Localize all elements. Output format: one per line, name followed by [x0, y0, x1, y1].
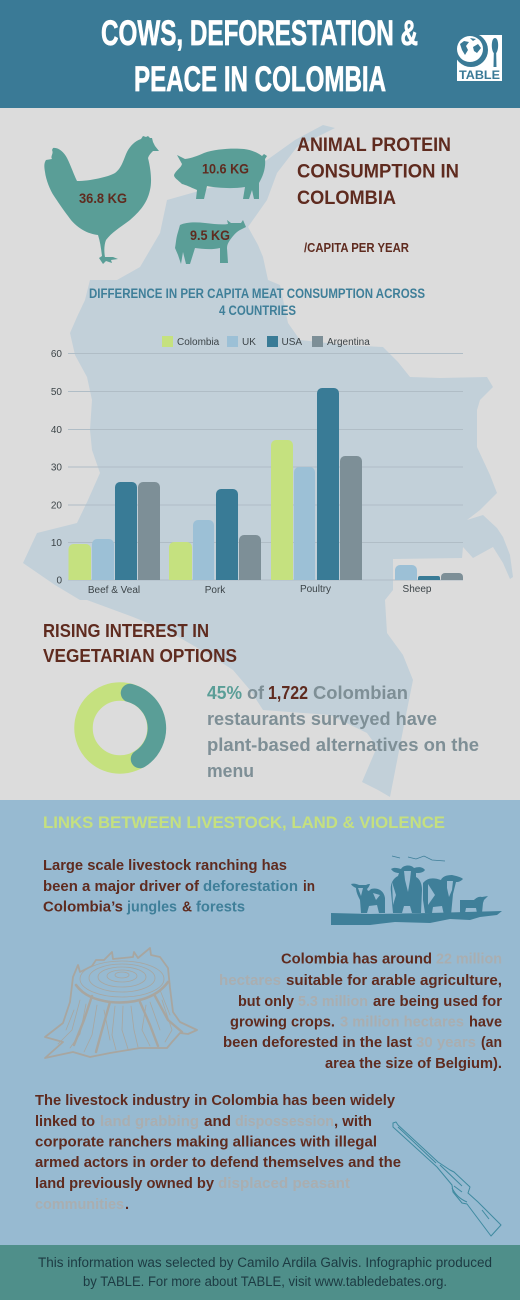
heading: animal protein consumption: ANIMAL PROTEIN — [297, 134, 451, 156]
legend — [162, 336, 370, 348]
text: arable land statistics: 30 years — [416, 1035, 476, 1051]
text: 45 percent of restaurants: 1,722 — [268, 683, 308, 703]
bars: pork — [169, 489, 261, 580]
text: ranching and deforestation: jungles — [126, 900, 177, 916]
text: ranching and deforestation: & — [182, 900, 192, 916]
chart title: DIFFERENCE IN PER CAPITA MEAT CONSUMPTION ACROSS — [89, 286, 425, 301]
text: 45 percent of restaurants: restaurants surveyed have — [207, 709, 437, 729]
text: arable land statistics: been deforested in the last — [223, 1035, 412, 1051]
per capita note: /CAPITA PER YEAR — [304, 241, 409, 255]
y axis labels: 0 — [56, 576, 62, 586]
icon: chicken with 36.8 kg: 36.8 KG — [79, 190, 127, 206]
title: PEACE IN COLOMBIA — [134, 60, 386, 99]
text: arable land statistics: suitable for arable agriculture, — [286, 973, 502, 989]
y axis labels — [51, 349, 62, 586]
text: arable land statistics: 5.3 million — [298, 994, 368, 1010]
text: arable land statistics: but only — [238, 994, 294, 1010]
text: arable land statistics: area the size of Belgium). — [325, 1056, 502, 1072]
category labels — [88, 584, 432, 596]
heading: animal protein consumption — [297, 134, 459, 209]
category labels: Poultry — [300, 584, 331, 595]
bar chart — [51, 336, 463, 596]
legend: Argentina — [327, 337, 370, 348]
donut chart: 45 percent — [84, 692, 157, 764]
credits text: This information was selected by Camilo Ardila Galvis. Infographic produced — [38, 1255, 492, 1270]
icon: cow with 9.5 kg — [175, 220, 246, 264]
y axis labels: 20 — [51, 500, 62, 512]
text: 45 percent of restaurants: of — [247, 683, 265, 703]
text: land grabbing and dispossession: dispossession — [235, 1114, 334, 1130]
text: land grabbing and dispossession: displaced peasant — [218, 1176, 350, 1192]
icon: birds over cows — [392, 856, 445, 861]
text: 45 percent of restaurants — [207, 683, 479, 781]
credits text: by TABLE. For more about TABLE, visit www.tabledebates.org. — [83, 1274, 447, 1289]
text: land grabbing and dispossession: The livestock industry in Colombia has been widely — [35, 1093, 395, 1109]
y axis labels: 60 — [51, 349, 62, 360]
icon: rifle — [393, 1122, 501, 1236]
header band — [0, 0, 520, 108]
text: land grabbing and dispossession: land grabbing — [100, 1114, 199, 1130]
y axis labels: 30 — [51, 462, 62, 474]
text: arable land statistics: hectares — [219, 973, 281, 989]
text: arable land statistics: have — [469, 1015, 502, 1031]
y axis labels: 40 — [51, 425, 62, 436]
text: arable land statistics: growing crops. — [230, 1015, 335, 1031]
icon: TABLE logo — [454, 33, 502, 82]
chart title — [89, 286, 425, 318]
category labels: Beef & Veal — [88, 585, 140, 596]
heading: vegetarian options: VEGETARIAN OPTIONS — [43, 646, 237, 666]
text: land grabbing and dispossession: and — [204, 1114, 231, 1130]
map of Colombia background — [23, 125, 513, 797]
text: arable land statistics — [219, 952, 502, 1072]
icon: chicken with 36.8 kg — [44, 136, 159, 264]
section heading: links: LINKS BETWEEN LIVESTOCK, LAND & VIOLENCE — [43, 813, 445, 832]
text: ranching and deforestation: Colombia’s — [43, 900, 123, 916]
legend: USA — [282, 337, 302, 348]
icon: cows on grass — [331, 865, 502, 925]
y axis labels: 10 — [51, 538, 62, 549]
text: ranching and deforestation: deforestation — [203, 879, 298, 895]
heading: animal protein consumption: CONSUMPTION IN — [297, 160, 459, 182]
text: land grabbing and dispossession — [35, 1093, 401, 1213]
legend: Colombia — [177, 337, 220, 348]
text: 45 percent of restaurants: menu — [207, 761, 254, 781]
heading: vegetarian options — [43, 621, 237, 666]
text: arable land statistics: are being used for — [373, 994, 502, 1010]
y axis labels: 50 — [51, 387, 62, 398]
icon: cow with 9.5 kg: 9.5 KG — [190, 227, 230, 243]
heading: vegetarian options: RISING INTEREST IN — [43, 621, 209, 641]
icon: pig with 10.6 kg: 10.6 KG — [202, 160, 249, 176]
text: arable land statistics: (an — [481, 1035, 502, 1051]
text: arable land statistics: Colombia has around — [281, 952, 432, 968]
text: ranching and deforestation: forests — [196, 900, 245, 916]
text: land grabbing and dispossession: . — [125, 1197, 129, 1213]
text: 45 percent of restaurants: plant-based alternatives on the — [207, 735, 479, 755]
text: 45 percent of restaurants: 45% — [207, 683, 242, 703]
text: land grabbing and dispossession: communities — [35, 1197, 124, 1213]
text: arable land statistics: 3 million hectares — [340, 1015, 464, 1031]
text: ranching and deforestation — [43, 858, 315, 916]
icon: tree stump — [45, 948, 197, 1058]
text: land grabbing and dispossession: , with — [334, 1114, 372, 1130]
chart title: 4 COUNTRIES — [219, 303, 296, 318]
text: ranching and deforestation: in — [303, 879, 315, 895]
bars: sheep — [395, 565, 463, 580]
category labels: Sheep — [403, 584, 432, 595]
heading: animal protein consumption: COLOMBIA — [297, 187, 396, 209]
text: ranching and deforestation: Large scale livestock ranching has — [43, 858, 287, 874]
text: land grabbing and dispossession: armed actors in order to defend themselves and the — [35, 1155, 401, 1171]
text: ranching and deforestation: been a major driver of — [43, 879, 199, 895]
icon: TABLE logo: TABLE — [459, 70, 500, 82]
category labels: Pork — [205, 585, 226, 596]
text: land grabbing and dispossession: corporate ranchers making alliances with illegal — [35, 1135, 377, 1151]
bars: beef and veal — [68, 482, 160, 580]
panel: links section background — [0, 800, 520, 1245]
text: arable land statistics: 22 million — [436, 952, 502, 968]
text: land grabbing and dispossession: linked to — [35, 1114, 95, 1130]
legend: UK — [242, 337, 256, 348]
credits text — [38, 1255, 492, 1289]
panel: footer — [0, 1245, 520, 1300]
text: land grabbing and dispossession: land previously owned by — [35, 1176, 214, 1192]
bars: poultry — [271, 388, 362, 580]
icon: pig with 10.6 kg — [174, 149, 267, 199]
text: 45 percent of restaurants: Colombian — [313, 683, 408, 703]
title — [101, 14, 418, 99]
